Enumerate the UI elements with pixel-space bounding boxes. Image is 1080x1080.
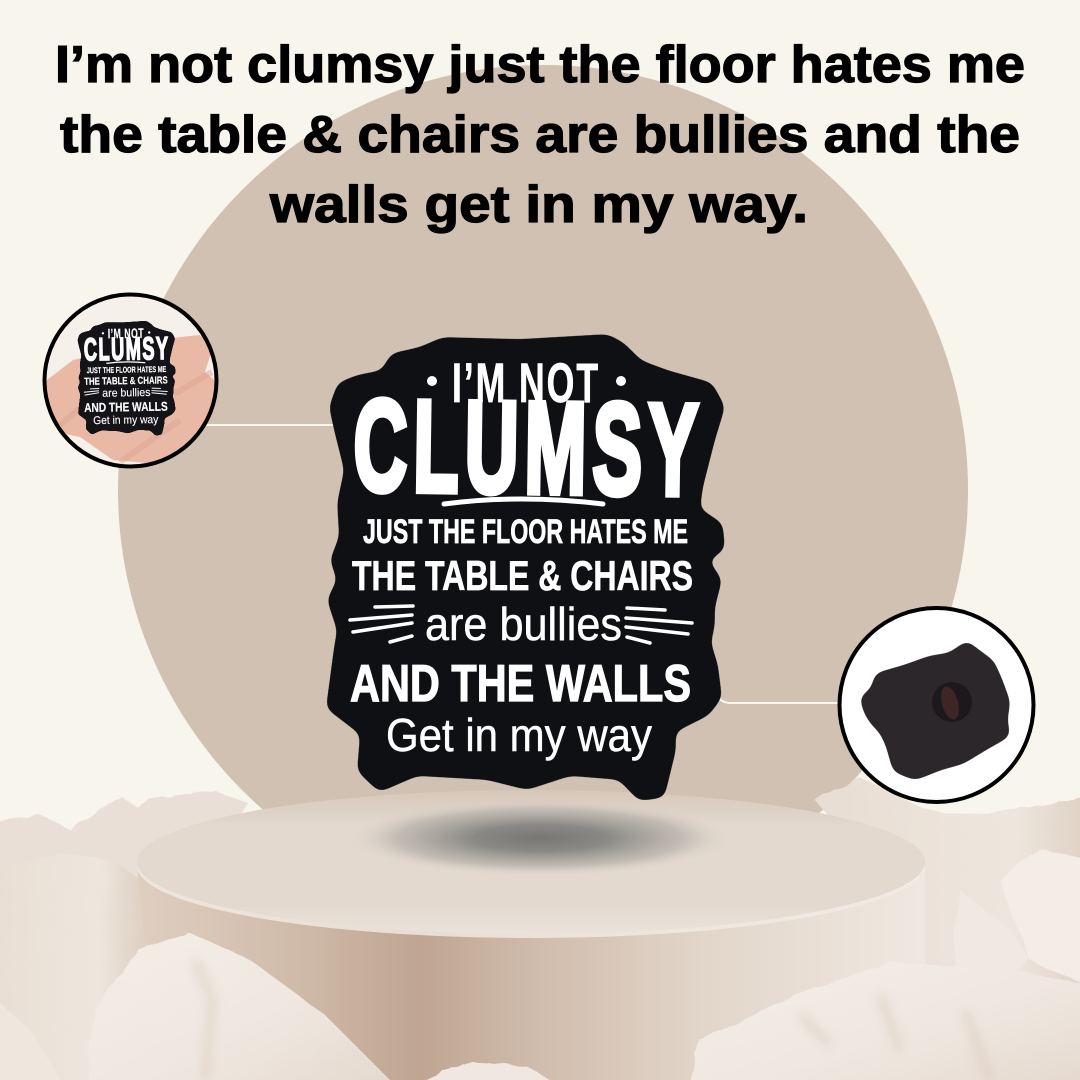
enamel pin <box>329 337 722 798</box>
rock shading <box>195 960 990 1080</box>
pedestal shadow <box>350 800 730 876</box>
left large rock <box>0 852 150 1080</box>
mini pin: are bullies <box>102 387 151 400</box>
mini pin: AND THE WALLS <box>84 399 168 415</box>
pin text: I'M NOT: I’M NOT <box>452 351 600 414</box>
mini pin: JUST THE FLOOR HATES ME <box>87 364 167 375</box>
large beige circle backdrop <box>118 65 968 915</box>
connector line: pin to back thumbnail <box>716 695 840 703</box>
pedestal <box>137 790 925 1080</box>
palm shading <box>60 372 212 462</box>
connector line: left thumbnail to pin <box>205 424 336 426</box>
thumbnail: pin back <box>840 608 1034 802</box>
hand <box>46 335 214 463</box>
pin text: Get in my way: Get in my way <box>386 709 652 761</box>
title: the table & chairs are bullies and the <box>60 106 1020 164</box>
title <box>55 36 1025 234</box>
thumbnail: pin held in hand <box>40 290 222 470</box>
pin back plate <box>862 643 1008 778</box>
pin text: AND THE WALLS: AND THE WALLS <box>350 655 691 713</box>
mini pin: CLUMSY <box>84 332 170 368</box>
pin text: CLUMSY: CLUMSY <box>353 373 705 523</box>
pin text: JUST THE FLOOR HATES ME: JUST THE FLOOR HATES ME <box>363 513 688 551</box>
title: I’m not clumsy just the floor hates me <box>55 36 1025 94</box>
title: walls get in my way. <box>269 176 808 234</box>
pin underline <box>444 499 603 504</box>
pin dots <box>427 376 626 386</box>
pin text: are bullies: are bullies <box>425 598 622 650</box>
mini pin: I’M NOT <box>108 326 144 341</box>
mini pin: Get in my way <box>93 414 159 427</box>
mini pin <box>77 321 176 436</box>
pin body <box>329 337 722 798</box>
rocks behind the pedestal <box>0 778 1080 1040</box>
rocks in front of the pedestal <box>0 932 1080 1080</box>
butterfly clutch <box>932 682 972 722</box>
pin streaks right <box>626 608 692 643</box>
mini pin: THE TABLE & CHAIRS <box>84 375 168 388</box>
pin text: THE TABLE & CHAIRS: THE TABLE & CHAIRS <box>352 552 693 599</box>
pin streaks left <box>350 606 413 642</box>
